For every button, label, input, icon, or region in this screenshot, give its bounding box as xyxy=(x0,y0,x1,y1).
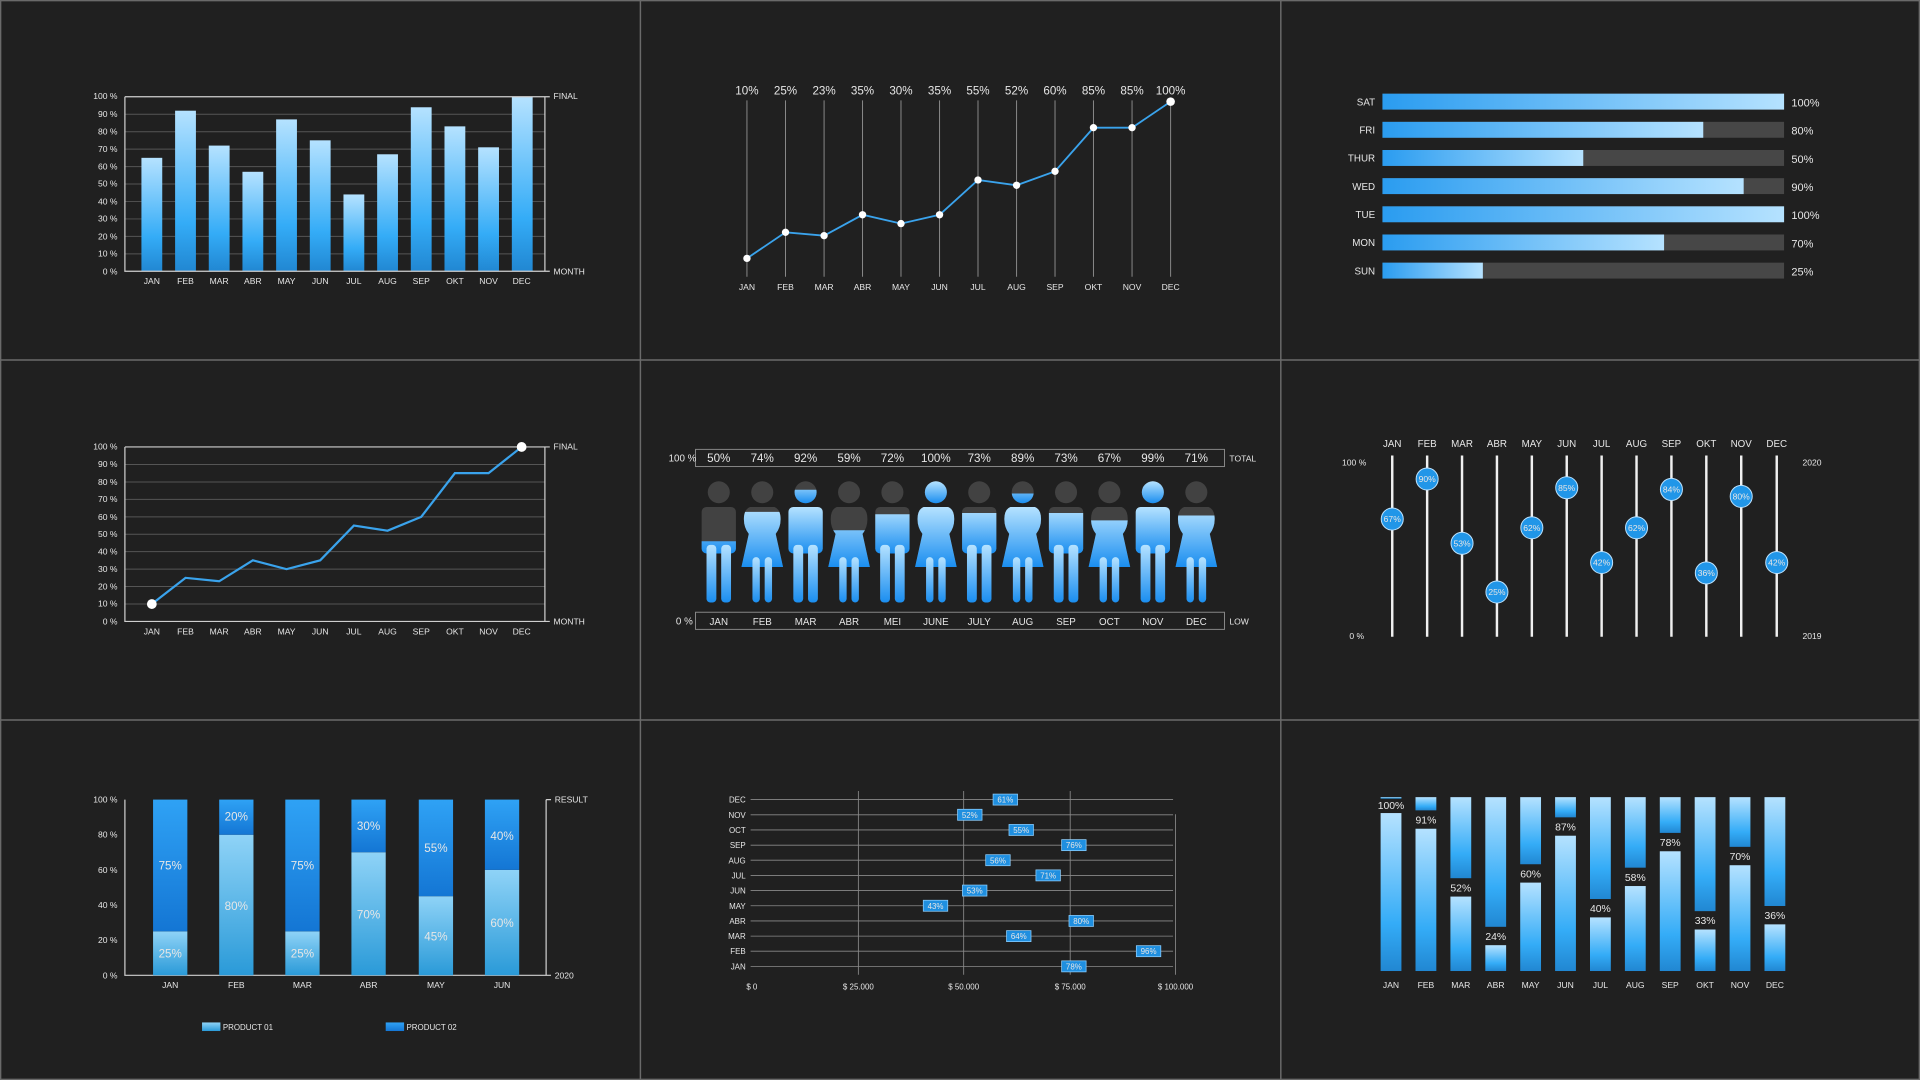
panel: slider dot chart: JUN xyxy=(1557,439,1576,450)
panel: people pictogram: NOV xyxy=(1142,617,1164,628)
panel: split column bars: 40% xyxy=(1590,904,1611,915)
panel: slider dot chart: 80% xyxy=(1733,492,1750,502)
panel: bar chart monthly: ABR xyxy=(244,276,262,286)
panel: slider dot chart: 100 % xyxy=(1342,457,1367,467)
panel: dollar range markers: 71% xyxy=(1040,871,1056,880)
panel: stacked product bars: MAR xyxy=(293,980,312,990)
panel: stacked product bars: RESULT xyxy=(555,795,589,805)
panel: line chart with vertical guides: SEP xyxy=(1046,282,1064,292)
panel: bar chart monthly: FEB xyxy=(177,276,194,286)
panel: dollar range markers: 53% xyxy=(967,887,983,896)
panel: line chart growth xyxy=(93,441,585,636)
panel: split column bars: 91% xyxy=(1416,815,1436,826)
panel: line chart growth: 10 % xyxy=(98,599,118,609)
panel: slider dot chart: 42% xyxy=(1593,558,1611,568)
panel: bar chart monthly: NOV xyxy=(479,276,498,286)
panel: bar chart monthly: 80 % xyxy=(98,127,118,137)
panel: dollar range markers: 56% xyxy=(990,856,1006,865)
panel: slider dot chart: OKT xyxy=(1696,439,1716,450)
panel: line chart with vertical guides: 85% xyxy=(1120,84,1144,97)
panel: slider dot chart: 2019 xyxy=(1802,631,1822,641)
panel: line chart with vertical guides: 52% xyxy=(1005,84,1028,97)
panel: line chart with vertical guides: JUL xyxy=(970,282,986,292)
panel: horizontal weekday bars: FRI xyxy=(1359,125,1375,136)
panel: stacked product bars: 2020 xyxy=(555,970,574,980)
panel: slider dot chart: 36% xyxy=(1698,568,1715,578)
panel: people pictogram: 50% xyxy=(707,452,730,465)
panel: dollar range markers: FEB xyxy=(730,947,746,956)
panel: stacked product bars: 55% xyxy=(424,842,448,855)
panel: people pictogram: 100% xyxy=(921,452,951,465)
panel: line chart with vertical guides: 85% xyxy=(1082,84,1105,97)
panel: split column bars: SEP xyxy=(1662,980,1679,990)
panel: dollar range markers: 61% xyxy=(997,796,1013,805)
panel: line chart with vertical guides: 25% xyxy=(774,84,797,97)
panel: bar chart monthly: 20 % xyxy=(98,231,118,241)
panel: stacked product bars: PRODUCT 01 xyxy=(223,1023,274,1032)
panel: horizontal weekday bars: SUN xyxy=(1354,266,1375,277)
panel: line chart growth: JAN xyxy=(144,626,160,636)
panel: stacked product bars: FEB xyxy=(228,980,245,990)
panel: slider dot chart: 25% xyxy=(1488,587,1506,597)
panel: stacked product bars: 100 % xyxy=(93,795,118,805)
panel: slider dot chart: 85% xyxy=(1558,483,1576,493)
panel: split column bars: DEC xyxy=(1766,980,1784,990)
panel: line chart growth: ABR xyxy=(244,626,262,636)
panel: line chart growth: MAY xyxy=(278,626,296,636)
panel: people pictogram: 99% xyxy=(1141,452,1164,465)
panel: people pictogram: 74% xyxy=(751,452,774,465)
panel: split column bars: OKT xyxy=(1696,980,1715,990)
panel: line chart with vertical guides: 60% xyxy=(1043,84,1067,97)
panel: split column bars: FEB xyxy=(1418,980,1435,990)
panel: line chart with vertical guides: 30% xyxy=(889,84,913,97)
panel: dollar range markers: JUL xyxy=(732,871,746,880)
panel: people pictogram: 59% xyxy=(837,452,861,465)
panel: horizontal weekday bars: 70% xyxy=(1791,238,1814,250)
panel: stacked product bars: JAN xyxy=(162,980,178,990)
panel: stacked product bars: 75% xyxy=(291,859,314,872)
panel: stacked product bars: 60 % xyxy=(98,865,118,875)
panel: stacked product bars xyxy=(93,795,589,1032)
panel: people pictogram: SEP xyxy=(1056,617,1076,628)
panel: line chart with vertical guides: DEC xyxy=(1162,282,1180,292)
panel: stacked product bars: 20% xyxy=(225,810,248,823)
panel: dollar range markers: 52% xyxy=(962,811,978,820)
panel: horizontal weekday bars: 100% xyxy=(1791,98,1820,110)
panel: stacked product bars: 30% xyxy=(357,820,380,833)
panel: bar chart monthly: OKT xyxy=(446,276,464,286)
panel: dollar range markers: JAN xyxy=(731,962,746,971)
panel: people pictogram: 71% xyxy=(1185,452,1208,465)
panel: dollar range markers: 96% xyxy=(1141,947,1157,956)
panel: stacked product bars: 70% xyxy=(357,908,380,921)
panel: horizontal weekday bars: MON xyxy=(1352,238,1375,249)
panel: line chart with vertical guides: 23% xyxy=(812,84,836,97)
panel: line chart growth: 30 % xyxy=(98,564,118,574)
panel: people pictogram: 72% xyxy=(881,452,904,465)
panel: people pictogram: 0 % xyxy=(676,616,693,627)
panel: dollar range markers: NOV xyxy=(729,811,746,820)
panel: bar chart monthly: MAR xyxy=(210,276,229,286)
panel: dollar range markers: 43% xyxy=(928,902,943,911)
panel: stacked product bars: 40% xyxy=(490,830,514,843)
panel: stacked product bars: 0 % xyxy=(103,970,118,980)
panel: bar chart monthly: 30 % xyxy=(98,214,118,224)
panel: slider dot chart: 42% xyxy=(1768,558,1786,568)
panel: line chart with vertical guides: 35% xyxy=(851,84,874,97)
panel: line chart growth: DEC xyxy=(513,626,531,636)
panel: split column bars: 78% xyxy=(1660,838,1681,849)
panel: dollar range markers: 76% xyxy=(1066,841,1082,850)
panel: dollar range markers: 55% xyxy=(1013,826,1029,835)
panel: slider dot chart: 53% xyxy=(1453,538,1471,548)
panel: people pictogram: 67% xyxy=(1098,452,1121,465)
panel: people pictogram: ABR xyxy=(839,617,859,628)
panel: horizontal weekday bars: 100% xyxy=(1791,210,1820,222)
panel: people pictogram: 100 % xyxy=(669,454,697,465)
panel: split column bars: JUL xyxy=(1593,980,1608,990)
panel: people pictogram: JUNE xyxy=(923,617,949,628)
panel: line chart growth: MAR xyxy=(210,626,229,636)
panel: split column bars: MAR xyxy=(1451,980,1470,990)
panel: line chart with vertical guides: NOV xyxy=(1123,282,1142,292)
panel: bar chart monthly: 100 % xyxy=(93,91,118,101)
panel: slider dot chart: MAR xyxy=(1451,439,1473,450)
panel: line chart growth: FEB xyxy=(177,626,194,636)
panel: people pictogram xyxy=(669,449,1256,629)
panel: horizontal weekday bars: WED xyxy=(1352,182,1375,193)
panel: split column bars: JUN xyxy=(1557,980,1574,990)
panel: line chart growth: 0 % xyxy=(103,616,118,626)
panel: slider dot chart: FEB xyxy=(1418,439,1437,450)
panel: line chart growth: NOV xyxy=(479,626,498,636)
panel: slider dot chart: 62% xyxy=(1523,523,1541,533)
panel: slider dot chart: 67% xyxy=(1384,514,1401,524)
panel: slider dot chart: 90% xyxy=(1419,474,1436,484)
panel: bar chart monthly: MAY xyxy=(278,276,296,286)
panel: slider dot chart: JAN xyxy=(1383,439,1401,450)
panel: line chart with vertical guides: 55% xyxy=(966,84,990,97)
panel: bar chart monthly: FINAL xyxy=(553,91,578,101)
panel: line chart with vertical guides: MAY xyxy=(892,282,910,292)
panel: people pictogram: JULY xyxy=(968,617,991,628)
panel: bar chart monthly: 50 % xyxy=(98,179,118,189)
panel: split column bars: 33% xyxy=(1695,916,1716,927)
panel: stacked product bars: PRODUCT 02 xyxy=(407,1023,457,1032)
panel: dollar range markers: $ 75.000 xyxy=(1055,982,1086,991)
panel: split column bars: NOV xyxy=(1731,980,1750,990)
panel: split column bars: 87% xyxy=(1555,823,1576,834)
panel: stacked product bars: 25% xyxy=(291,948,314,961)
panel: horizontal weekday bars: 80% xyxy=(1791,126,1814,138)
panel: dollar range markers: 64% xyxy=(1011,932,1027,941)
panel: people pictogram: OCT xyxy=(1099,617,1120,628)
panel: slider dot chart xyxy=(1342,439,1822,641)
panel: stacked product bars: 60% xyxy=(490,917,514,930)
panel: line chart with vertical guides: JUN xyxy=(931,282,948,292)
panel: people pictogram: 89% xyxy=(1011,452,1034,465)
panel: bar chart monthly: JUL xyxy=(346,276,362,286)
panel: horizontal weekday bars: 50% xyxy=(1791,154,1814,166)
panel: line chart growth: 100 % xyxy=(93,441,118,451)
panel: split column bars: 58% xyxy=(1625,873,1646,884)
panel: people pictogram: 73% xyxy=(968,452,991,465)
panel: people pictogram: 73% xyxy=(1054,452,1078,465)
panel: line chart growth: JUN xyxy=(312,626,329,636)
panel: bar chart monthly: 70 % xyxy=(98,144,118,154)
panel: slider dot chart: AUG xyxy=(1626,439,1647,450)
panel: line chart growth: 50 % xyxy=(98,529,118,539)
panel: bar chart monthly: DEC xyxy=(513,276,531,286)
panel: line chart growth: FINAL xyxy=(553,441,578,451)
panel: line chart with vertical guides: FEB xyxy=(777,282,794,292)
panel: bar chart monthly: 40 % xyxy=(98,196,118,206)
panel: people pictogram: MAR xyxy=(795,617,816,628)
panel: dollar range markers: 78% xyxy=(1066,962,1082,971)
panel: dollar range markers: DEC xyxy=(729,796,746,805)
panel: split column bars: 36% xyxy=(1764,911,1785,922)
panel: line chart growth: 70 % xyxy=(98,494,118,504)
panel: line chart growth: SEP xyxy=(413,626,430,636)
panel: slider dot chart: JUL xyxy=(1593,439,1611,450)
panel: dollar range markers: 80% xyxy=(1073,917,1089,926)
panel: line chart growth: 40 % xyxy=(98,547,118,557)
panel: stacked product bars: 25% xyxy=(159,948,182,961)
panel: split column bars: 52% xyxy=(1450,883,1471,894)
panel: split column bars: 100% xyxy=(1378,801,1404,812)
panel: dollar range markers: $ 0 xyxy=(746,982,758,991)
panel: stacked product bars: 40 % xyxy=(98,900,118,910)
panel: line chart with vertical guides xyxy=(735,84,1185,292)
panel: stacked product bars: JUN xyxy=(494,980,510,990)
panel: slider dot chart: 62% xyxy=(1628,523,1645,533)
panel: split column bars: 24% xyxy=(1485,932,1506,943)
panel: line chart with vertical guides: OKT xyxy=(1085,282,1103,292)
panel: split column bars: 60% xyxy=(1520,869,1541,880)
panel: line chart growth: 20 % xyxy=(98,582,118,592)
panel: people pictogram: MEI xyxy=(884,617,901,628)
panel: stacked product bars: 20 % xyxy=(98,935,118,945)
panel: dollar range markers: $ 50.000 xyxy=(948,982,980,991)
panel: people pictogram: 92% xyxy=(794,452,817,465)
panel: stacked product bars: 75% xyxy=(159,859,182,872)
panel: stacked product bars: MAY xyxy=(427,980,445,990)
panel: line chart growth: MONTH xyxy=(553,616,585,626)
panel: slider dot chart: 0 % xyxy=(1349,631,1365,641)
panel: dollar range markers: OCT xyxy=(729,826,746,835)
panel: people pictogram: TOTAL xyxy=(1229,454,1256,464)
panel: line chart growth: 60 % xyxy=(98,512,118,522)
panel: line chart growth: OKT xyxy=(446,626,464,636)
panel: horizontal weekday bars: THUR xyxy=(1348,154,1375,165)
panel: slider dot chart: SEP xyxy=(1662,439,1682,450)
panel: people pictogram: FEB xyxy=(753,617,772,628)
panel: split column bars xyxy=(1378,797,1785,990)
panel: dollar range markers: JUN xyxy=(730,887,746,896)
panel: line chart growth: 90 % xyxy=(98,459,118,469)
panel: line chart with vertical guides: ABR xyxy=(854,282,871,292)
panel: bar chart monthly xyxy=(93,91,585,286)
panel: stacked product bars: 80% xyxy=(225,900,248,913)
panel: horizontal weekday bars: 25% xyxy=(1791,267,1814,279)
panel: dollar range markers: SEP xyxy=(730,841,746,850)
panel: horizontal weekday bars: TUE xyxy=(1356,210,1376,221)
panel: dollar range markers: MAR xyxy=(728,932,746,941)
panel: people pictogram: AUG xyxy=(1012,617,1033,628)
panel: people pictogram: JAN xyxy=(710,617,728,628)
panel: split column bars: MAY xyxy=(1522,980,1540,990)
panel: bar chart monthly: SEP xyxy=(413,276,430,286)
panel: split column bars: ABR xyxy=(1487,980,1505,990)
panel: bar chart monthly: MONTH xyxy=(553,266,585,276)
panel: slider dot chart: MAY xyxy=(1522,439,1543,450)
panel: line chart with vertical guides: 35% xyxy=(928,84,951,97)
panel: horizontal weekday bars xyxy=(1348,94,1820,279)
panel: line chart growth: 80 % xyxy=(98,477,118,487)
panel: dollar range markers: AUG xyxy=(729,856,746,865)
panel: horizontal weekday bars: SAT xyxy=(1357,97,1375,108)
panel: bar chart monthly: JAN xyxy=(144,276,160,286)
panel: line chart with vertical guides: 10% xyxy=(735,84,759,97)
panel: line chart with vertical guides: 100% xyxy=(1156,84,1185,97)
panel: line chart with vertical guides: JAN xyxy=(739,282,755,292)
panel: split column bars: AUG xyxy=(1626,980,1645,990)
panel: line chart growth: AUG xyxy=(378,626,397,636)
panel: slider dot chart: NOV xyxy=(1731,439,1752,450)
panel: bar chart monthly: JUN xyxy=(312,276,329,286)
panel: slider dot chart: DEC xyxy=(1766,439,1787,450)
panel: line chart with vertical guides: MAR xyxy=(815,282,834,292)
panel: stacked product bars: 80 % xyxy=(98,830,118,840)
panel: horizontal weekday bars: 90% xyxy=(1791,182,1814,194)
panel: stacked product bars: ABR xyxy=(360,980,377,990)
panel: split column bars: 70% xyxy=(1730,852,1750,863)
panel: line chart with vertical guides: AUG xyxy=(1007,282,1026,292)
panel: bar chart monthly: 10 % xyxy=(98,249,118,259)
panel: dollar range markers: $ 100.000 xyxy=(1158,982,1194,991)
panel: slider dot chart: 84% xyxy=(1663,485,1680,495)
panel: bar chart monthly: AUG xyxy=(378,276,397,286)
panel: dollar range markers: MAY xyxy=(729,902,746,911)
panel: dollar range markers: ABR xyxy=(729,917,746,926)
panel: people pictogram: LOW xyxy=(1229,616,1250,626)
panel: bar chart monthly: 0 % xyxy=(103,266,118,276)
panel: dollar range markers: $ 25.000 xyxy=(843,982,874,991)
panel: stacked product bars: 45% xyxy=(424,930,448,943)
panel: slider dot chart: 2020 xyxy=(1802,457,1822,467)
panel: dollar range markers xyxy=(728,791,1194,991)
panel: line chart growth: JUL xyxy=(346,626,362,636)
panel: bar chart monthly: 60 % xyxy=(98,162,118,172)
panel: bar chart monthly: 90 % xyxy=(98,109,118,119)
panel: split column bars: JAN xyxy=(1383,980,1399,990)
panel: slider dot chart: ABR xyxy=(1487,439,1507,450)
panel: people pictogram: DEC xyxy=(1186,617,1207,628)
